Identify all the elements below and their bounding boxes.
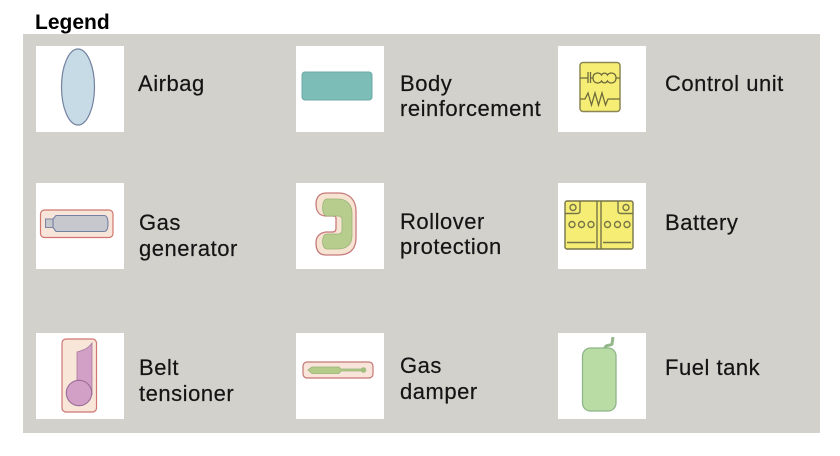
icon: control unit (580, 62, 620, 112)
label: gas damper: damper (400, 379, 478, 404)
legend item: fuel tank (558, 333, 761, 419)
label: gas generator: Gas (139, 210, 181, 235)
legend item: belt tensioner (36, 333, 234, 419)
label: airbag: Airbag (138, 71, 205, 96)
icon: fuel tank (582, 337, 616, 411)
legend item: gas damper (296, 333, 478, 419)
icon: body reinforcement (302, 72, 372, 100)
label: rollover protection: protection (400, 234, 502, 259)
label: control unit: Control unit (665, 71, 784, 96)
legend item: airbag (36, 46, 205, 132)
legend item: control unit (558, 46, 784, 132)
legend item: rollover protection (296, 183, 502, 269)
icon: airbag (62, 49, 94, 125)
label: rollover protection: Rollover (400, 209, 485, 234)
label: battery: Battery (665, 210, 738, 235)
icon: battery (565, 201, 633, 249)
label: fuel tank: Fuel tank (665, 355, 761, 380)
heading: Legend: Legend (35, 11, 110, 34)
icon: rollover protection (316, 193, 356, 255)
legend item: gas generator (36, 183, 238, 269)
icon: belt tensioner (62, 339, 96, 412)
icon: gas damper (303, 362, 373, 378)
label: body reinforcement: Body (400, 71, 452, 96)
label: belt tensioner: Belt (139, 355, 179, 380)
label: belt tensioner: tensioner (139, 381, 234, 406)
legend item: body reinforcement (296, 46, 541, 132)
legend item: battery (558, 183, 738, 269)
label: gas damper: Gas (400, 353, 442, 378)
icon: gas generator (40, 210, 113, 238)
label: body reinforcement: reinforcement (400, 96, 541, 121)
label: gas generator: generator (139, 236, 238, 261)
